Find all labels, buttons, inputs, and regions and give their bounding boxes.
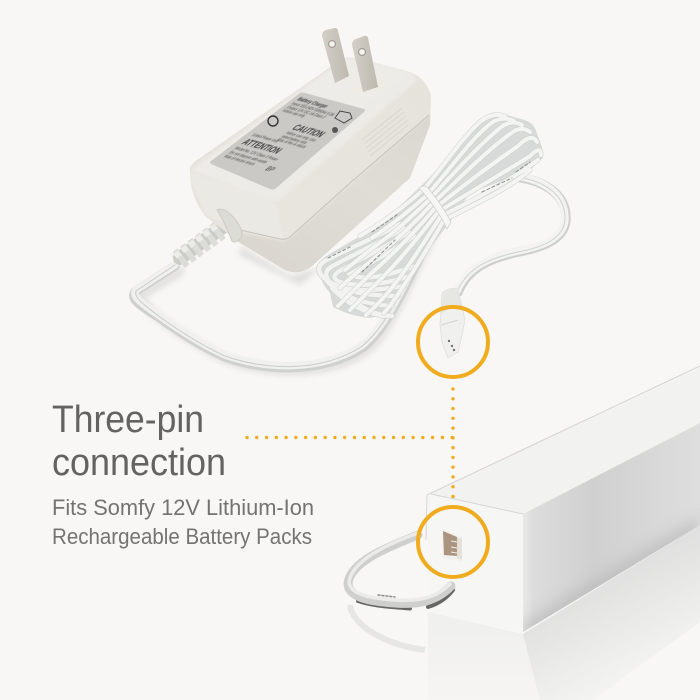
bar top face <box>427 368 700 514</box>
label text: Risk of fire or shock <box>275 138 308 149</box>
prong right <box>352 36 378 92</box>
label text: ATTENTION <box>239 137 285 156</box>
three-pin plug connector <box>440 288 465 358</box>
bar end cap edge <box>426 494 523 540</box>
UL mark <box>268 116 278 126</box>
heading <box>52 399 226 484</box>
label text: Risk of electric shock <box>222 154 257 166</box>
adapter shadow <box>240 246 320 285</box>
heading: connection <box>52 442 226 484</box>
adapter silhouette <box>190 58 431 272</box>
bar side face <box>523 423 700 632</box>
adapter shaded faces <box>195 59 430 272</box>
subheading: Fits Somfy 12V Lithium-Ion <box>52 495 314 520</box>
house icon <box>335 111 352 123</box>
cable printing <box>378 595 395 597</box>
heading: Three-pin <box>52 399 204 441</box>
label text: Listed Power Unit <box>251 132 281 143</box>
adapter label <box>210 92 365 190</box>
round mark <box>332 127 338 133</box>
adapter lower shell <box>238 115 430 272</box>
bar end cap <box>426 494 523 632</box>
adapter strain relief <box>174 226 224 262</box>
lobe strands <box>319 224 416 316</box>
label text: Battery Charger <box>295 97 330 110</box>
subheading: Rechargeable Battery Packs <box>52 524 312 549</box>
loose cable to connector <box>457 175 566 292</box>
subheading <box>52 495 314 549</box>
label text: Indoor use only. Use <box>285 131 318 143</box>
adapter front upper face <box>186 170 284 240</box>
adapter vent ribs <box>362 108 408 156</box>
label text: BP <box>263 165 278 173</box>
bar side shading <box>523 519 700 632</box>
label text: Do not dispose with waste <box>228 150 270 164</box>
label text <box>219 97 353 174</box>
label text: Model No. 12V Class 2 Power <box>233 146 280 162</box>
bundle backdrop <box>318 112 543 318</box>
battery socket <box>442 529 462 562</box>
cable tie <box>419 186 451 229</box>
dotted connector horizontal <box>247 436 453 439</box>
highlight circle: plug <box>418 307 488 377</box>
bar top edge <box>427 366 700 495</box>
coiled cable bundle <box>318 112 543 318</box>
battery bar cable loop reflection <box>350 605 425 650</box>
label text: Indoor use only <box>281 108 308 118</box>
battery pack bar <box>426 366 700 650</box>
label text: CAUTION <box>289 123 329 139</box>
front strands <box>338 190 444 315</box>
label text: Input 100-240V 50/60Hz 0.3A <box>290 101 337 117</box>
highlight circle: socket <box>418 507 488 577</box>
adapter seam <box>240 115 429 239</box>
prong left <box>322 28 349 83</box>
label text: rated battery only <box>280 134 310 145</box>
label text: Output 12V DC 1A Class 2 <box>285 105 328 119</box>
power adapter cable, left loop <box>134 232 432 371</box>
side reflection <box>523 525 700 700</box>
dotted connector vertical <box>451 389 455 498</box>
fan strands <box>423 115 541 220</box>
end cap reflection <box>428 612 593 700</box>
power adapter body <box>186 28 440 280</box>
battery bar cable loop <box>348 533 453 608</box>
cable printing <box>328 162 530 272</box>
adapter right upper face <box>277 80 436 238</box>
adapter top face <box>191 58 417 202</box>
strain relief collar <box>217 209 242 242</box>
